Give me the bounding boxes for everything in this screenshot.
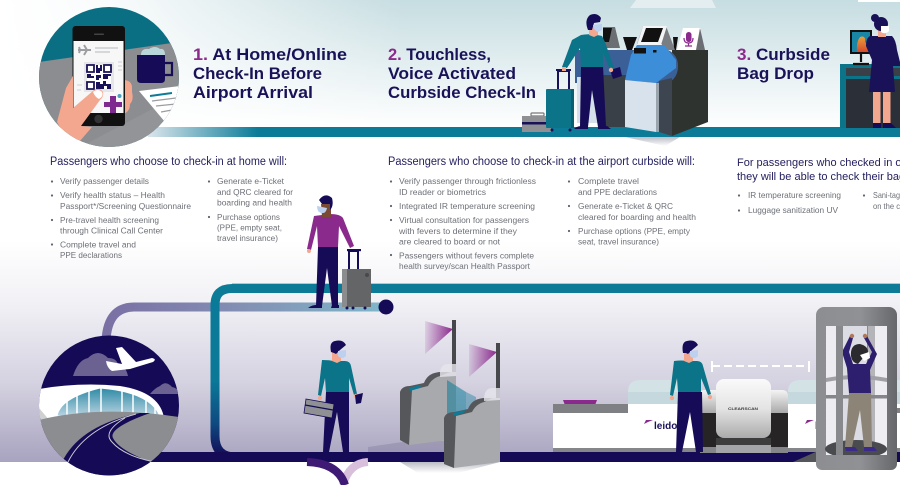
logo: leidos left: leidos [654,421,683,432]
clouds [73,353,180,394]
heading: step 2: Voice Activated [388,65,516,83]
heading: step 1: Check-In Before [193,65,322,83]
journey track: navy floor line [150,452,900,462]
text block: step 1 details: Passport*/Screening Questionnaire [60,201,191,211]
text block: step 2 details: Generate e-Ticket & QRC [578,201,673,211]
text block: step 2 details: Virtual consultation for passengers [399,215,529,225]
text block: step 2 details: Complete travel [578,176,639,186]
text block: step 2 details: seat, travel insurance) [578,236,659,246]
journey track: end dot [378,300,394,314]
voice sign with microphone [677,28,705,50]
illustration: body scanner booth [793,307,897,470]
purple tray [563,400,597,408]
text block: step 3 details: Luggage sanitization UV [748,205,838,215]
text block: step 1 details: PPE declarations [60,250,122,260]
background: lower floor gradient [0,240,900,462]
scanner body: CLEARSCAN [728,406,758,411]
illustration: briefcase at curbside [522,113,551,132]
front gate [444,343,500,468]
person: traveller with purple shirt and suitcase [307,195,371,310]
text block: step 1 details: Verify passenger details [60,176,149,186]
text block: step 2 details [388,156,696,271]
person: bag drop agent [866,14,900,128]
icon: paper document [139,86,180,122]
thermal monitor [850,30,872,64]
heading: step 2: Curbside Check-In [388,84,536,102]
dark rear kiosk block [672,50,708,136]
icon: purple health plus [104,94,122,113]
text block: step 2 details: ID reader or biometrics [399,187,486,197]
back gate [400,320,456,445]
text block: step 1 details: travel insurance) [217,233,278,243]
briefcase [304,399,334,418]
text block: step 1 details: Complete travel and [60,240,136,250]
text block: step 1 details: boarding and health [217,198,292,208]
icon: phone check-in circle [39,7,180,147]
text block: step 1 details: Passengers who choose to check-in at home will: [50,156,287,168]
background: sky gradient [0,0,900,128]
text block: step 1 details: through Clinical Call Center [60,226,163,236]
text block: step 3 details [737,157,900,215]
heading: step 2: 2. Touchless, [388,46,491,64]
text block: step 2 details: and PPE declarations [578,187,657,197]
text block: step 1 details: (PPE, empty seat, [217,222,282,232]
fingers behind phone [125,80,133,114]
text block: step 1 details: Purchase options [217,212,280,222]
gate shadow [368,441,470,452]
heading: step 1: Airport Arrival [193,84,313,102]
teal glass barrier [447,380,466,420]
heading: step 3: 3. Curbside [737,46,830,64]
journey track: teal path to navy floor [215,284,900,457]
heading: step 3 [737,46,830,83]
illustration: security gates [368,320,500,473]
grey rolling suitcase [342,249,371,310]
conveyor right [788,380,900,452]
terminal building [39,385,164,425]
text block: step 2 details: Integrated IR temperature screening [399,201,535,211]
heading: step 1 [193,46,347,102]
text block: step 2 details: Passengers without fevers complete [399,250,534,260]
text block: step 1 details: Verify health status – Health [60,190,165,200]
person: traveller at kiosk [562,14,622,129]
heading: step 2 [388,46,536,102]
text block: step 1 details: Pre-travel health screening [60,215,159,225]
conveyor table left [553,404,717,452]
logo: leidos right: leidos [815,421,844,432]
text block: step 1 details: and QRC cleared for [217,187,293,197]
text block: step 2 details: with fevers to determine if they [398,226,518,236]
text block: step 1 details: Generate e-Ticket [217,176,285,186]
text block: step 2 details: are cleared to board or not [399,236,501,246]
glass cover left [628,380,700,404]
illustration: bag drop counter [840,64,900,128]
QR code [84,62,114,92]
person: traveller at scanner [670,340,712,452]
illustration: teal suitcase [546,69,574,132]
left kiosk screen [603,27,620,48]
scanner body [699,379,788,453]
text block: step 2 details: Verify passenger through frictionless [399,176,536,186]
centre kiosk [625,26,676,136]
journey track: purple branches below floor [307,462,368,485]
text block: step 2 details: health survey/scan Health Passport [399,261,531,271]
logo: leidos left [644,420,683,432]
blue rear band [575,50,678,83]
hand and thumb over phone [57,76,103,141]
person: passenger being scanned [842,334,877,451]
illustration: curbside kiosks [575,26,708,136]
heading: step 1: 1. At Home/Online [193,46,347,64]
icon: coffee mug [137,47,172,83]
journey track: purple path from airport [106,307,380,340]
text block: step 1 details [50,156,293,260]
text block: step 2 details: Passengers who choose to check-in at the airport curbside will: [388,156,695,168]
logo: leidos right [805,420,844,432]
booth windows [825,326,887,458]
person: traveller with briefcase [304,340,363,452]
heading: step 3: Bag Drop [737,65,814,83]
roadway [39,412,179,476]
icon: airport terminal circle [39,335,180,476]
icon: smartphone [72,26,125,126]
text block: step 3 details: IR temperature screening [748,190,841,200]
text block: step 2 details: cleared for boarding and health [578,212,696,222]
black rear kiosk screens [623,37,678,50]
top teal timeline band [148,127,900,146]
illustration: baggage scanner conveyor [553,379,900,453]
icon: airplane [106,347,155,371]
text block: step 2 details: Purchase options (PPE, empty [578,226,691,236]
distance marker: dashed line [712,361,809,372]
